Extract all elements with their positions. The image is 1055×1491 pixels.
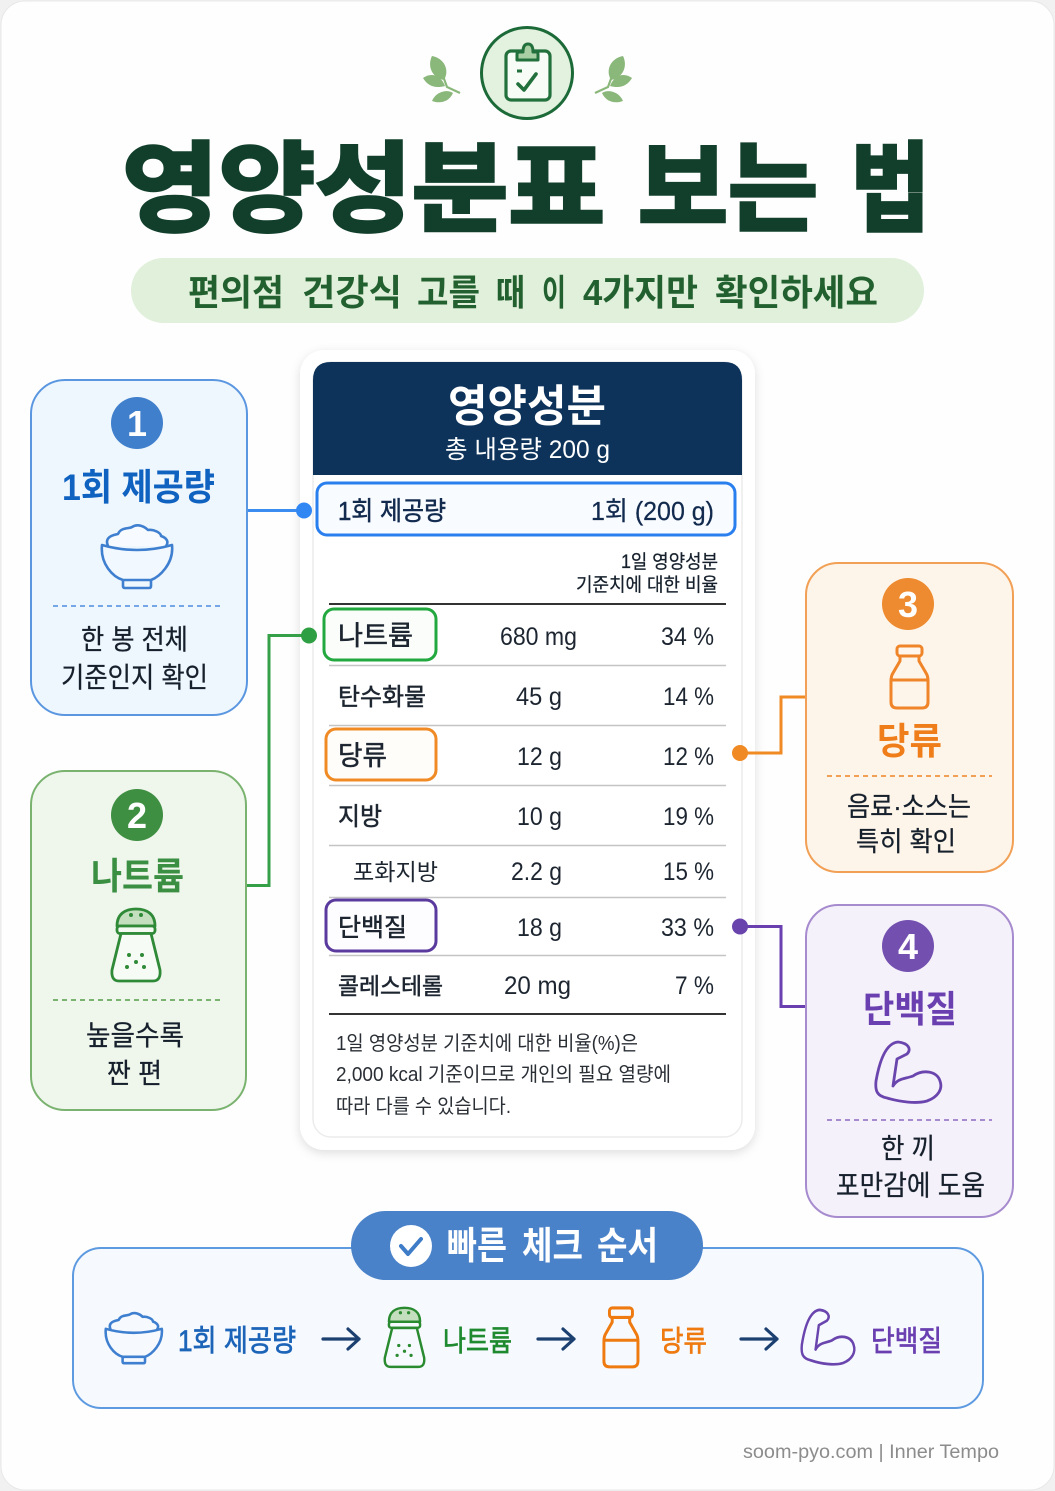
footnote: 따라 다를 수 있습니다. (336, 1095, 511, 1118)
badge 3 (882, 578, 934, 630)
subtitle pill: 때 (496, 272, 525, 313)
row: cholesterol: 7 % (675, 972, 714, 1000)
panel: nutrition facts label (300, 350, 755, 1150)
row: sodium (324, 609, 714, 660)
arrow 2 (538, 1329, 574, 1349)
step 3: sugars: 당류 (660, 1326, 707, 1358)
row: cholesterol (338, 972, 714, 1000)
badge 4 (882, 920, 934, 972)
row: carbohydrate: 탄수화물 (338, 684, 426, 711)
row: saturated fat: 15 % (663, 858, 714, 886)
row: cholesterol: 20 mg (504, 972, 571, 1000)
icon: salt shaker (112, 909, 160, 981)
label header: 총 내용량 200 g (445, 436, 610, 464)
panel: 1 serving size: 한 봉 전체 (81, 624, 188, 655)
title: 법 (851, 134, 930, 244)
step 4: protein: 단백질 (871, 1325, 942, 1358)
panel: 1 serving size: 1회 제공량 (62, 467, 215, 508)
icon: flexed arm (876, 1042, 941, 1102)
badge 1: 1 (127, 403, 147, 444)
footer credit: soom-pyo.com | Inner Tempo (743, 1442, 999, 1463)
row: carbohydrate: 14 % (663, 683, 714, 711)
title: 영양성분표 (122, 134, 605, 244)
row: fat: 지방 (338, 803, 382, 831)
badge 1 (111, 397, 163, 449)
panel: 4 protein: 한 끼 (881, 1133, 935, 1164)
panel: 3 sugars: 음료·소스는 (847, 792, 971, 822)
row: saturated fat (353, 858, 714, 886)
panel: 2 sodium: 높을수록 (86, 1020, 184, 1051)
row: carbohydrate: 45 g (516, 683, 562, 711)
panel: 4 protein: 단백질 (863, 989, 957, 1030)
arrow 3 (741, 1329, 777, 1349)
footnote: 2,000 kcal 기준이므로 개인의 필요 열량에 (336, 1063, 671, 1086)
badge 3: 3 (898, 584, 918, 625)
daily value column header: 기준치에 대한 비율 (576, 574, 718, 596)
row: fat: 10 g (517, 803, 562, 831)
panel: 2 sodium: 나트륨 (91, 856, 184, 897)
row: sugars (326, 729, 714, 780)
step 2: sodium (385, 1308, 512, 1367)
pill heading: 체크 (522, 1226, 583, 1268)
step 3: sugars (604, 1308, 707, 1367)
panel: 3 sugars (806, 563, 1013, 872)
row: sugars: 당류 (338, 741, 387, 771)
arrow 1 (323, 1329, 359, 1349)
footnote (336, 1032, 671, 1118)
row: saturated fat: 2.2 g (511, 858, 562, 886)
subtitle pill (131, 258, 924, 323)
row: protein: 33 % (661, 914, 714, 942)
panel: 1 serving size: 기준인지 확인 (61, 662, 208, 693)
icon: clipboard emblem with leaves (423, 28, 632, 118)
icon: bottle (891, 646, 928, 708)
row: protein: 18 g (517, 914, 562, 942)
step 4: protein (802, 1310, 942, 1364)
row: sugars: 12 g (517, 743, 562, 771)
row: serving size highlight: 1회 (200 g) (591, 496, 714, 526)
row: serving size highlight: 1회 제공량 (338, 496, 446, 526)
subtitle pill: 확인하세요 (715, 272, 878, 313)
panel: 2 sodium: 짠 편 (107, 1058, 162, 1089)
row: fat (338, 803, 714, 831)
step 1: serving size (106, 1313, 296, 1363)
badge 2 (111, 789, 163, 841)
pill heading: 빠른 (447, 1226, 507, 1268)
connector: sodium (246, 628, 317, 886)
panel: quick check order (73, 1211, 983, 1408)
connector: serving size (247, 502, 312, 518)
connector: sugars (732, 697, 806, 761)
panel: 3 sugars: 당류 (877, 721, 942, 762)
subtitle pill: 건강식 (302, 272, 402, 313)
row: fat: 19 % (663, 803, 714, 831)
title (122, 134, 930, 244)
label header (313, 362, 742, 475)
row: saturated fat: 포화지방 (353, 859, 438, 885)
panel: 4 protein (806, 905, 1013, 1217)
pill heading: 순서 (597, 1226, 658, 1268)
row: sodium: 34 % (661, 623, 714, 651)
badge 4: 4 (898, 926, 918, 967)
icon: rice bowl (102, 525, 172, 588)
daily value column header (576, 551, 718, 596)
row: protein: 단백질 (338, 914, 407, 942)
panel: 1 serving size (31, 380, 247, 715)
row: sodium: 나트륨 (338, 621, 413, 651)
panel: 2 sodium (31, 771, 246, 1110)
step 1: serving size: 1회 제공량 (178, 1325, 296, 1358)
row: sodium: 680 mg (500, 623, 577, 651)
badge 2: 2 (127, 795, 147, 836)
row: cholesterol: 콜레스테롤 (338, 973, 443, 999)
row: carbohydrate (338, 683, 714, 711)
title: 보는 (638, 134, 818, 244)
subtitle pill: 4가지만 (583, 272, 698, 313)
panel: 3 sugars: 특히 확인 (856, 827, 956, 857)
row: sugars: 12 % (663, 743, 714, 771)
subtitle pill: 이 (542, 272, 566, 313)
daily value column header: 1일 영양성분 (621, 551, 718, 573)
step 2: sodium: 나트륨 (443, 1326, 512, 1358)
subtitle pill: 편의점 (188, 272, 284, 313)
connector: protein (732, 918, 806, 1006)
panel: 4 protein: 포만감에 도움 (836, 1170, 985, 1201)
label header: 영양성분 (448, 382, 606, 431)
row: protein (326, 900, 714, 951)
footnote: 1일 영양성분 기준치에 대한 비율(%)은 (336, 1032, 638, 1055)
subtitle pill: 고를 (417, 272, 480, 313)
pill heading (351, 1211, 703, 1280)
row: serving size highlight (317, 483, 735, 535)
